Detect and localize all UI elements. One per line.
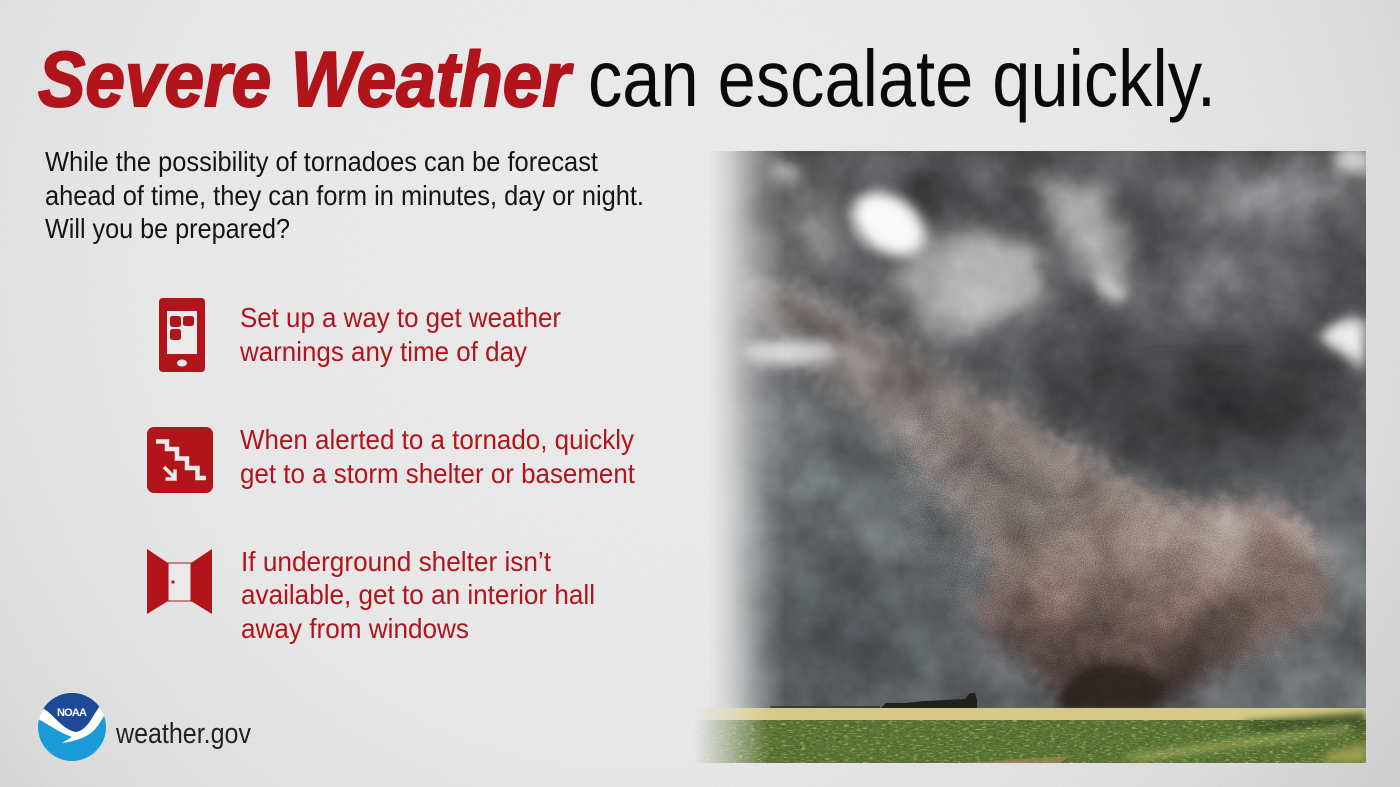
dust band <box>735 271 1185 610</box>
text: tornado alert <box>240 424 635 489</box>
right white cloud <box>1316 317 1366 372</box>
bright opening <box>842 181 936 266</box>
title <box>38 34 1216 123</box>
text: weather warnings: warnings any time of day <box>239 336 527 367</box>
icon: phone <box>159 298 205 372</box>
intro text: Will you be prepared? <box>45 213 290 244</box>
intro text: While the possibility of tornadoes can be forecast <box>45 146 598 177</box>
field <box>690 708 1366 763</box>
lower-left haze <box>756 384 961 557</box>
upper-right clouds <box>1140 151 1240 177</box>
tornado debris cloud <box>978 502 1326 712</box>
intro text <box>45 146 644 244</box>
title: can escalate quickly. <box>588 34 1216 123</box>
upper-left clouds <box>828 152 1135 186</box>
NOAA logo: NOAA <box>57 707 87 719</box>
text: tornado alert: When alerted to a tornado, quickly <box>240 424 634 455</box>
icon: interior door <box>147 549 212 614</box>
text: interior hall: If underground shelter isn’t <box>241 546 551 577</box>
storm sky and tornado <box>714 151 1366 708</box>
title: Severe Weather <box>38 35 573 123</box>
website: weather.gov <box>115 718 251 750</box>
icon: stairs <box>147 427 213 493</box>
text: interior hall <box>241 546 595 644</box>
text: tornado alert: get to a storm shelter or basement <box>240 458 635 489</box>
central light cloud <box>880 232 1050 328</box>
dark storm core <box>1040 320 1360 470</box>
tree line <box>770 693 977 708</box>
dust grain <box>878 386 1341 696</box>
low white cloud <box>742 340 838 364</box>
intro text: ahead of time, they can form in minutes, day or night. <box>45 180 644 211</box>
cloud texture <box>690 151 1366 708</box>
text: weather warnings: Set up a way to get weather <box>240 302 561 333</box>
text: interior hall: available, get to an interior hall <box>241 579 595 610</box>
photo: tornado over field <box>690 146 1400 763</box>
text: weather warnings <box>239 302 561 367</box>
NOAA logo <box>38 693 107 761</box>
text: interior hall: away from windows <box>241 613 469 644</box>
